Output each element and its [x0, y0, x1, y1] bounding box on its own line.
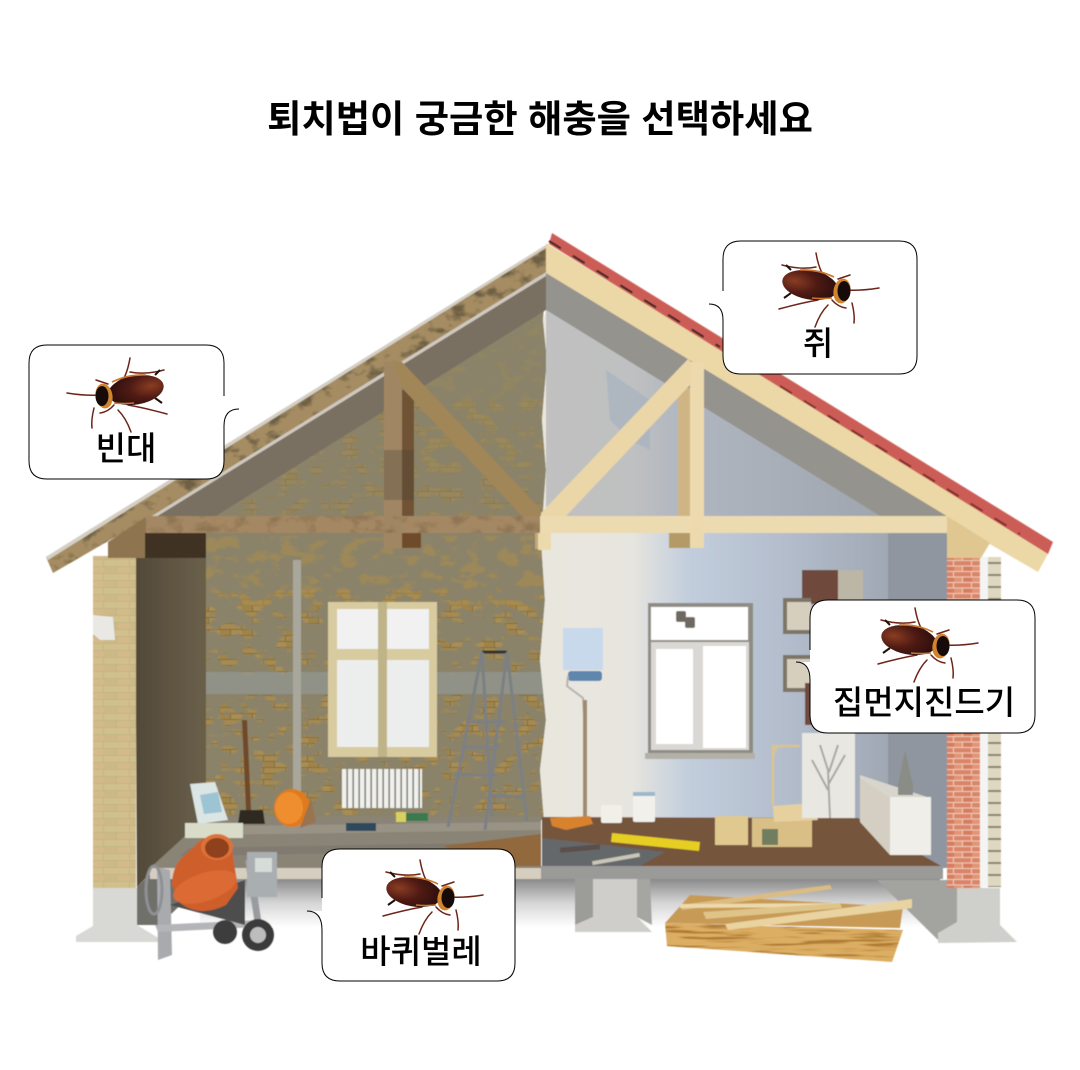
- right window: [645, 603, 755, 759]
- cardboard boxes: [715, 803, 818, 847]
- right eave block: [947, 516, 990, 558]
- left king post: [401, 390, 414, 516]
- left floor: [150, 817, 543, 879]
- pipes: [293, 560, 301, 792]
- paint cans: [550, 792, 655, 830]
- tools on left floor: [346, 812, 428, 831]
- ground shadow: [200, 879, 940, 927]
- callout: 쥐: [709, 241, 917, 374]
- right attic wall shading: [546, 310, 880, 516]
- right brick wall: [947, 556, 981, 888]
- red roof tiles: [549, 233, 1053, 554]
- left window: [328, 602, 437, 757]
- cement bags: [185, 782, 243, 838]
- left outer brick wall: [93, 556, 136, 889]
- right side wall lower: [877, 880, 957, 940]
- title: 퇴치법이 궁금한 해충을 선택하세요: [267, 98, 813, 140]
- right side wall: [888, 533, 948, 868]
- right concrete footing: [938, 888, 1017, 943]
- right tie beam: [540, 516, 947, 533]
- icon: cockroach: [383, 860, 483, 934]
- shovel: [238, 720, 265, 824]
- left eave block: [108, 517, 146, 558]
- icon: cockroach: [67, 358, 167, 432]
- right roof structure: [538, 233, 1053, 572]
- left plaster patch: [93, 615, 115, 640]
- right attic wall patches: [606, 370, 650, 450]
- callout: 빈대: [29, 345, 239, 479]
- left diagonal brace: [392, 360, 541, 516]
- label: 빈대: 빈대: [96, 430, 156, 467]
- right king post: [678, 388, 691, 516]
- label: 쥐: 쥐: [803, 325, 833, 362]
- paint roller: [567, 671, 602, 818]
- pendant lamps: [676, 611, 695, 628]
- mixer drum: [169, 834, 241, 911]
- orange bucket: [274, 789, 316, 828]
- right rafter: [546, 243, 1050, 572]
- right ceiling board: [546, 272, 950, 516]
- callout: 집먼지진드기: [796, 600, 1035, 733]
- vase: [898, 750, 913, 795]
- white cabinet: [860, 775, 931, 855]
- step ladder: [448, 652, 527, 830]
- left tie beam: [146, 516, 542, 533]
- left half: aged back wall: [205, 311, 547, 820]
- label: 바퀴벌레: 바퀴벌레: [360, 933, 482, 970]
- right half: back wall: [540, 310, 890, 820]
- left rafter: [46, 245, 546, 573]
- lumber stack: [660, 885, 912, 965]
- label: 집먼지진드기: 집먼지진드기: [833, 684, 1015, 721]
- cement mixer: [146, 834, 277, 960]
- left side wall: [135, 556, 206, 887]
- icon: cockroach: [878, 608, 978, 682]
- floor pier: [575, 879, 652, 932]
- wooden easel: [773, 746, 800, 806]
- right insulation: [980, 557, 989, 887]
- icon: cockroach: [779, 253, 879, 327]
- paint swatch: [563, 628, 603, 670]
- right diagonal brace: [541, 359, 691, 516]
- radiator: [342, 769, 422, 808]
- spirit level and tools: [560, 833, 700, 865]
- wall shelves: [783, 570, 863, 725]
- left roof structure: [46, 245, 546, 573]
- left side wall lower: [137, 820, 206, 925]
- callout: 바퀴벌레: [307, 849, 515, 981]
- right outer brick: [988, 557, 1001, 887]
- left concrete footing: [76, 888, 165, 942]
- wall art: [802, 733, 855, 818]
- right floor: [541, 817, 943, 879]
- left ceiling board: [150, 272, 546, 517]
- mixer wheels: [213, 919, 274, 951]
- house illustration: [46, 233, 1053, 965]
